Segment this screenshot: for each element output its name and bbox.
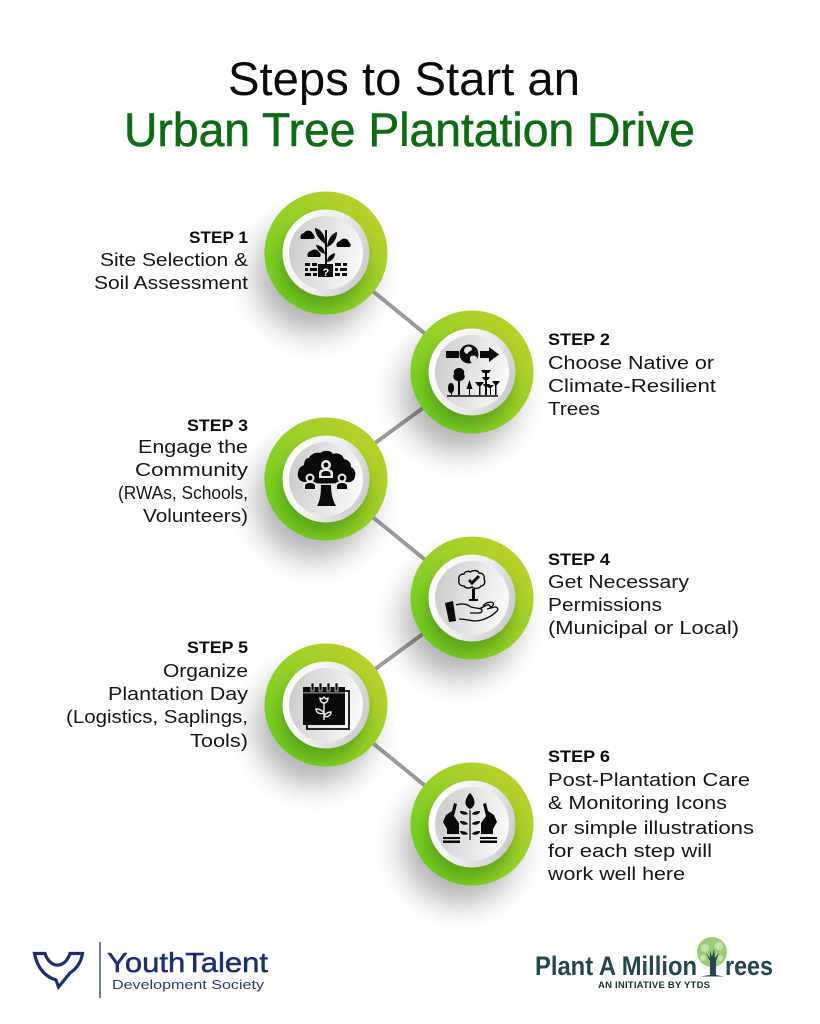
title: Urban Tree Plantation Drive xyxy=(124,103,695,156)
connector lines xyxy=(326,253,472,824)
title xyxy=(124,52,695,156)
step 1 text xyxy=(94,228,249,293)
step 5 text: (Logistics, Saplings, xyxy=(66,706,248,727)
logo: Plant A Million Trees: rees xyxy=(725,951,773,981)
step 5 node xyxy=(256,644,388,785)
icon: tree trunk forming the letter T xyxy=(700,949,724,976)
step 5 text: STEP 5 xyxy=(187,638,248,657)
icon: tree crown xyxy=(697,937,727,967)
step 1 text: Soil Assessment xyxy=(94,272,248,293)
step 6 text: Post-Plantation Care xyxy=(548,769,750,790)
icon: community tree xyxy=(298,451,355,506)
step 4 text: (Municipal or Local) xyxy=(548,617,739,638)
step 5 text: Organize xyxy=(163,660,248,681)
step 3 text: (RWAs, Schools, xyxy=(118,482,248,503)
step 3 text: Volunteers) xyxy=(143,505,248,526)
logo: Plant A Million Trees: AN INITIATIVE BY YTDS xyxy=(598,980,710,991)
step 3 node xyxy=(256,418,388,559)
step 6 text xyxy=(547,747,754,884)
icon: speech-bubble Y mark xyxy=(34,954,82,987)
title: Steps to Start an xyxy=(228,52,580,105)
step 5 text xyxy=(66,638,249,751)
icon: hand holding tree with check xyxy=(445,571,498,622)
step 6 text: or simple illustrations xyxy=(548,817,754,838)
step 1 node: ? xyxy=(322,267,330,279)
step 5 text: Plantation Day xyxy=(108,683,249,704)
step 2 text: STEP 2 xyxy=(548,330,610,349)
step 1 text: Site Selection & xyxy=(100,249,249,270)
logo: Plant A Million Trees xyxy=(535,937,773,991)
step 4 text: Permissions xyxy=(548,594,662,615)
step 6 text: for each step will xyxy=(548,840,712,861)
step 1 node xyxy=(256,192,388,333)
step 2 node xyxy=(402,310,534,452)
step 4 node xyxy=(402,536,534,678)
logo: Youth Talent Development Society xyxy=(34,942,268,998)
icon: hands protecting plant xyxy=(443,793,497,843)
step 6 text: STEP 6 xyxy=(548,747,610,766)
step 3 text: Community xyxy=(135,459,249,480)
logo: Youth Talent Development Society: Development Society xyxy=(112,978,265,992)
step 6 node xyxy=(402,762,534,904)
step 4 text: Get Necessary xyxy=(548,571,690,592)
step 6 text: work well here xyxy=(547,863,685,884)
step 4 text: STEP 4 xyxy=(548,550,611,569)
step 2 text: Choose Native or xyxy=(548,352,714,373)
step 5 text: Tools) xyxy=(190,730,248,751)
icon: calendar with sapling xyxy=(303,683,349,729)
step 3 text: Engage the xyxy=(138,436,248,457)
logo: Youth Talent Development Society: YouthTalent xyxy=(107,947,268,978)
icon: globe, arrow and native trees xyxy=(446,344,500,397)
step 6 text: & Monitoring Icons xyxy=(548,792,727,813)
step 3 text xyxy=(118,416,249,526)
step 2 text: Trees xyxy=(548,398,600,419)
step 3 text: STEP 3 xyxy=(187,416,248,435)
step 4 text xyxy=(548,550,739,638)
step 2 text xyxy=(548,330,716,419)
step 1 text: STEP 1 xyxy=(189,228,248,247)
step 2 text: Climate-Resilient xyxy=(548,375,716,396)
icon: plant and soil question xyxy=(300,228,351,277)
logo: Plant A Million Trees: Plant A Million xyxy=(535,951,697,981)
